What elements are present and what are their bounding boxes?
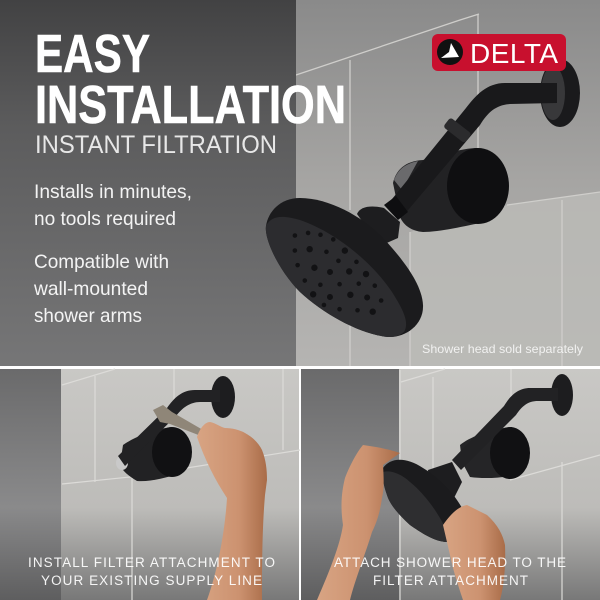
note: shower head sold separately: Shower head sold separately <box>422 342 583 356</box>
hand and arm <box>197 422 267 600</box>
caption: INSTALL FILTER ATTACHMENT TO <box>28 555 275 570</box>
right hand <box>443 505 505 600</box>
stone column <box>0 369 61 600</box>
wall flange <box>551 374 573 416</box>
logo: Delta <box>432 34 566 71</box>
text block: compatibility <box>33 251 169 327</box>
subheading: INSTANT FILTRATION <box>35 131 277 159</box>
heading: easy installation: EASY <box>35 24 150 84</box>
wall tile lines <box>62 369 300 600</box>
text block: compatibility: Compatible with <box>34 251 169 273</box>
wall flange <box>540 59 580 127</box>
caption: ATTACH SHOWER HEAD TO THE <box>334 555 566 570</box>
panel: step 1 install filter <box>0 369 300 600</box>
wrench <box>153 405 203 436</box>
caption: YOUR EXISTING SUPPLY LINE <box>41 573 262 588</box>
caption <box>334 555 566 588</box>
shower head <box>266 198 423 337</box>
shower arm <box>452 388 558 470</box>
heading: easy installation <box>35 24 346 135</box>
text block: installs in minutes: no tools required <box>34 208 176 230</box>
panel: hero photo with headline <box>0 0 600 366</box>
shower arm <box>384 83 557 220</box>
filter attachment <box>460 427 530 479</box>
text block: compatibility: wall-mounted <box>33 278 148 300</box>
heading: easy installation: INSTALLATION <box>35 75 346 135</box>
filter attachment <box>393 148 509 232</box>
text block: installs in minutes: Installs in minutes, <box>34 181 192 203</box>
wall tile lines <box>400 369 600 600</box>
caption <box>28 555 275 588</box>
text block: installs in minutes <box>34 181 192 230</box>
stone column <box>301 369 399 600</box>
caption: FILTER ATTACHMENT <box>373 573 528 588</box>
left hand <box>317 445 400 600</box>
spray nozzles <box>269 216 397 335</box>
dark stone column <box>0 0 296 366</box>
panel: step 2 attach shower head <box>301 369 600 600</box>
shower arm <box>118 390 220 466</box>
wall flange <box>211 376 235 418</box>
filter attachment <box>116 427 192 481</box>
shower head <box>382 460 463 542</box>
logo: Delta: DELTA <box>470 38 558 69</box>
text block: compatibility: shower arms <box>34 305 142 327</box>
wall tile background <box>0 0 600 366</box>
